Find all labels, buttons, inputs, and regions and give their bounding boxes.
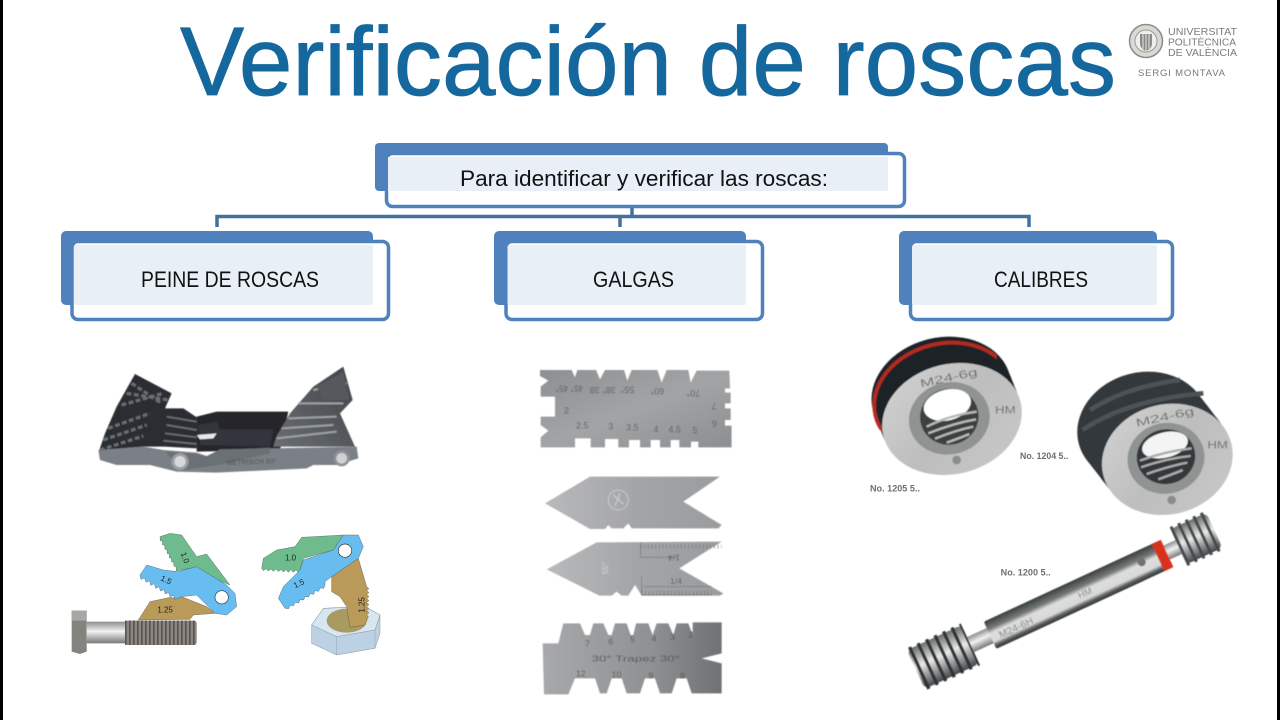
logo: Universitat Politècnica de València <box>1130 24 1237 79</box>
photo: notched thread gauge: 30° Trapez 30° <box>592 654 680 664</box>
box: Galgas: GALGAS <box>593 267 674 292</box>
photo: threaded plug gauge <box>907 512 1224 689</box>
gauge blade 1.25: 1.25 <box>357 597 366 613</box>
logo text <box>1168 27 1237 59</box>
photo: threaded plug gauge: HM <box>1076 586 1094 601</box>
gauge blade 1.25 <box>138 597 215 620</box>
title: Verificación de roscas <box>180 7 1116 116</box>
icon: university seal <box>1130 24 1162 58</box>
photo: thick ring gauge: HM <box>1207 439 1228 451</box>
right black edge <box>1277 0 1280 720</box>
photo: notched thread gauge: 7 <box>585 639 590 649</box>
photo: thin ring gauge: HM <box>995 404 1016 416</box>
gauge blade 1.5 <box>140 565 237 615</box>
photo: thick ring gauge <box>1065 358 1245 529</box>
gauge blade 1.0 <box>160 533 230 585</box>
box: Peine de roscas <box>61 231 388 320</box>
box: Para identificar y verificar las roscas <box>375 143 904 206</box>
gauge blade 1.0: 1.0 <box>179 551 191 565</box>
catalogue labels: No. 1204 5.. <box>1020 451 1068 461</box>
photo: fish-tail gauge 2: 55° <box>601 562 610 574</box>
photo: rectangular thread gauge: 3.5 <box>626 423 638 433</box>
gauge blade 1.25: 1.25 <box>157 605 173 614</box>
photo: rectangular thread gauge: 45° 45° <box>555 383 583 393</box>
photo: fish-tail gauge 2: 1/4 <box>670 576 682 586</box>
catalogue labels <box>870 451 1068 578</box>
box: Calibres: CALIBRES <box>994 267 1088 292</box>
photo: notched thread gauge <box>543 622 722 694</box>
photo: rectangular thread gauge: 55° <box>620 384 634 394</box>
box: Para identificar y verificar las roscas: Para identificar y verificar las roscas: <box>460 166 828 191</box>
box: Peine de roscas: PEINE DE ROSCAS <box>141 267 319 292</box>
photo: threaded plug gauge: M24-6H <box>997 616 1035 641</box>
photo: notched thread gauge: 5 <box>630 635 635 645</box>
photo: folding thread comb set <box>98 367 358 473</box>
photo: rectangular thread gauge: 60° <box>650 386 664 396</box>
box: Galgas <box>494 231 762 320</box>
photo: folding thread comb set: METRISCH 60° <box>226 457 277 467</box>
photo: thin ring gauge <box>870 336 1022 476</box>
photo: thin ring gauge: M24-6g <box>919 366 979 390</box>
photo: thick ring gauge: M24-6g <box>1135 406 1195 430</box>
photo: rectangular thread gauge <box>540 370 732 447</box>
photo: rectangular thread gauge: 4.5 <box>668 425 681 435</box>
gauge blade 1.5: 1.5 <box>292 577 306 590</box>
photo: fish-tail gauge 2: 1/4 <box>668 553 680 563</box>
photo: notched thread gauge: 2 <box>688 629 693 639</box>
logo text: UNIVERSITAT <box>1168 27 1237 38</box>
gauge blade 1.0: 1.0 <box>285 554 297 563</box>
photo: rectangular thread gauge: 5 <box>692 425 697 435</box>
photo: rectangular thread gauge: 7 <box>711 401 716 411</box>
photo: notched thread gauge: 3 <box>670 632 675 642</box>
author name: SERGI MONTAVA <box>1138 68 1226 79</box>
photo: notched thread gauge: 12 <box>576 669 586 679</box>
illustration: comb on nut <box>262 535 380 655</box>
catalogue labels: No. 1205 5.. <box>870 484 920 494</box>
bolt <box>72 611 197 654</box>
photo: rectangular thread gauge: 2.5 <box>576 420 588 430</box>
photo: notched thread gauge: 10 <box>612 670 621 680</box>
left black edge <box>0 0 3 720</box>
photo: fish-tail gauge 1 <box>545 477 722 529</box>
photo: fish-tail gauge 2 <box>547 542 723 596</box>
logo text: POLITÈCNICA <box>1168 36 1236 48</box>
photo: rectangular thread gauge: 70° <box>686 388 700 398</box>
photo: rectangular thread gauge: 4 <box>653 425 658 435</box>
hex nut <box>312 607 380 655</box>
connector lines <box>217 206 1029 227</box>
photo: rectangular thread gauge: 6 <box>712 418 717 428</box>
logo text: DE VALÈNCIA <box>1168 46 1237 59</box>
box: Calibres <box>899 231 1172 320</box>
photo: rectangular thread gauge: 3 <box>608 421 613 431</box>
photo: notched thread gauge: 4 <box>652 634 657 644</box>
photo: notched thread gauge: 9 <box>648 670 653 680</box>
photo: notched thread gauge: 6 <box>608 636 613 646</box>
photo: notched thread gauge: 8 <box>680 670 685 680</box>
photo: rectangular thread gauge: 38° 38 <box>590 385 616 395</box>
gauge blade 1.5: 1.5 <box>159 574 174 587</box>
photo: rectangular thread gauge: 2 <box>564 405 569 415</box>
illustration: comb on bolt <box>72 533 237 654</box>
catalogue labels: No. 1200 5.. <box>1001 568 1051 578</box>
